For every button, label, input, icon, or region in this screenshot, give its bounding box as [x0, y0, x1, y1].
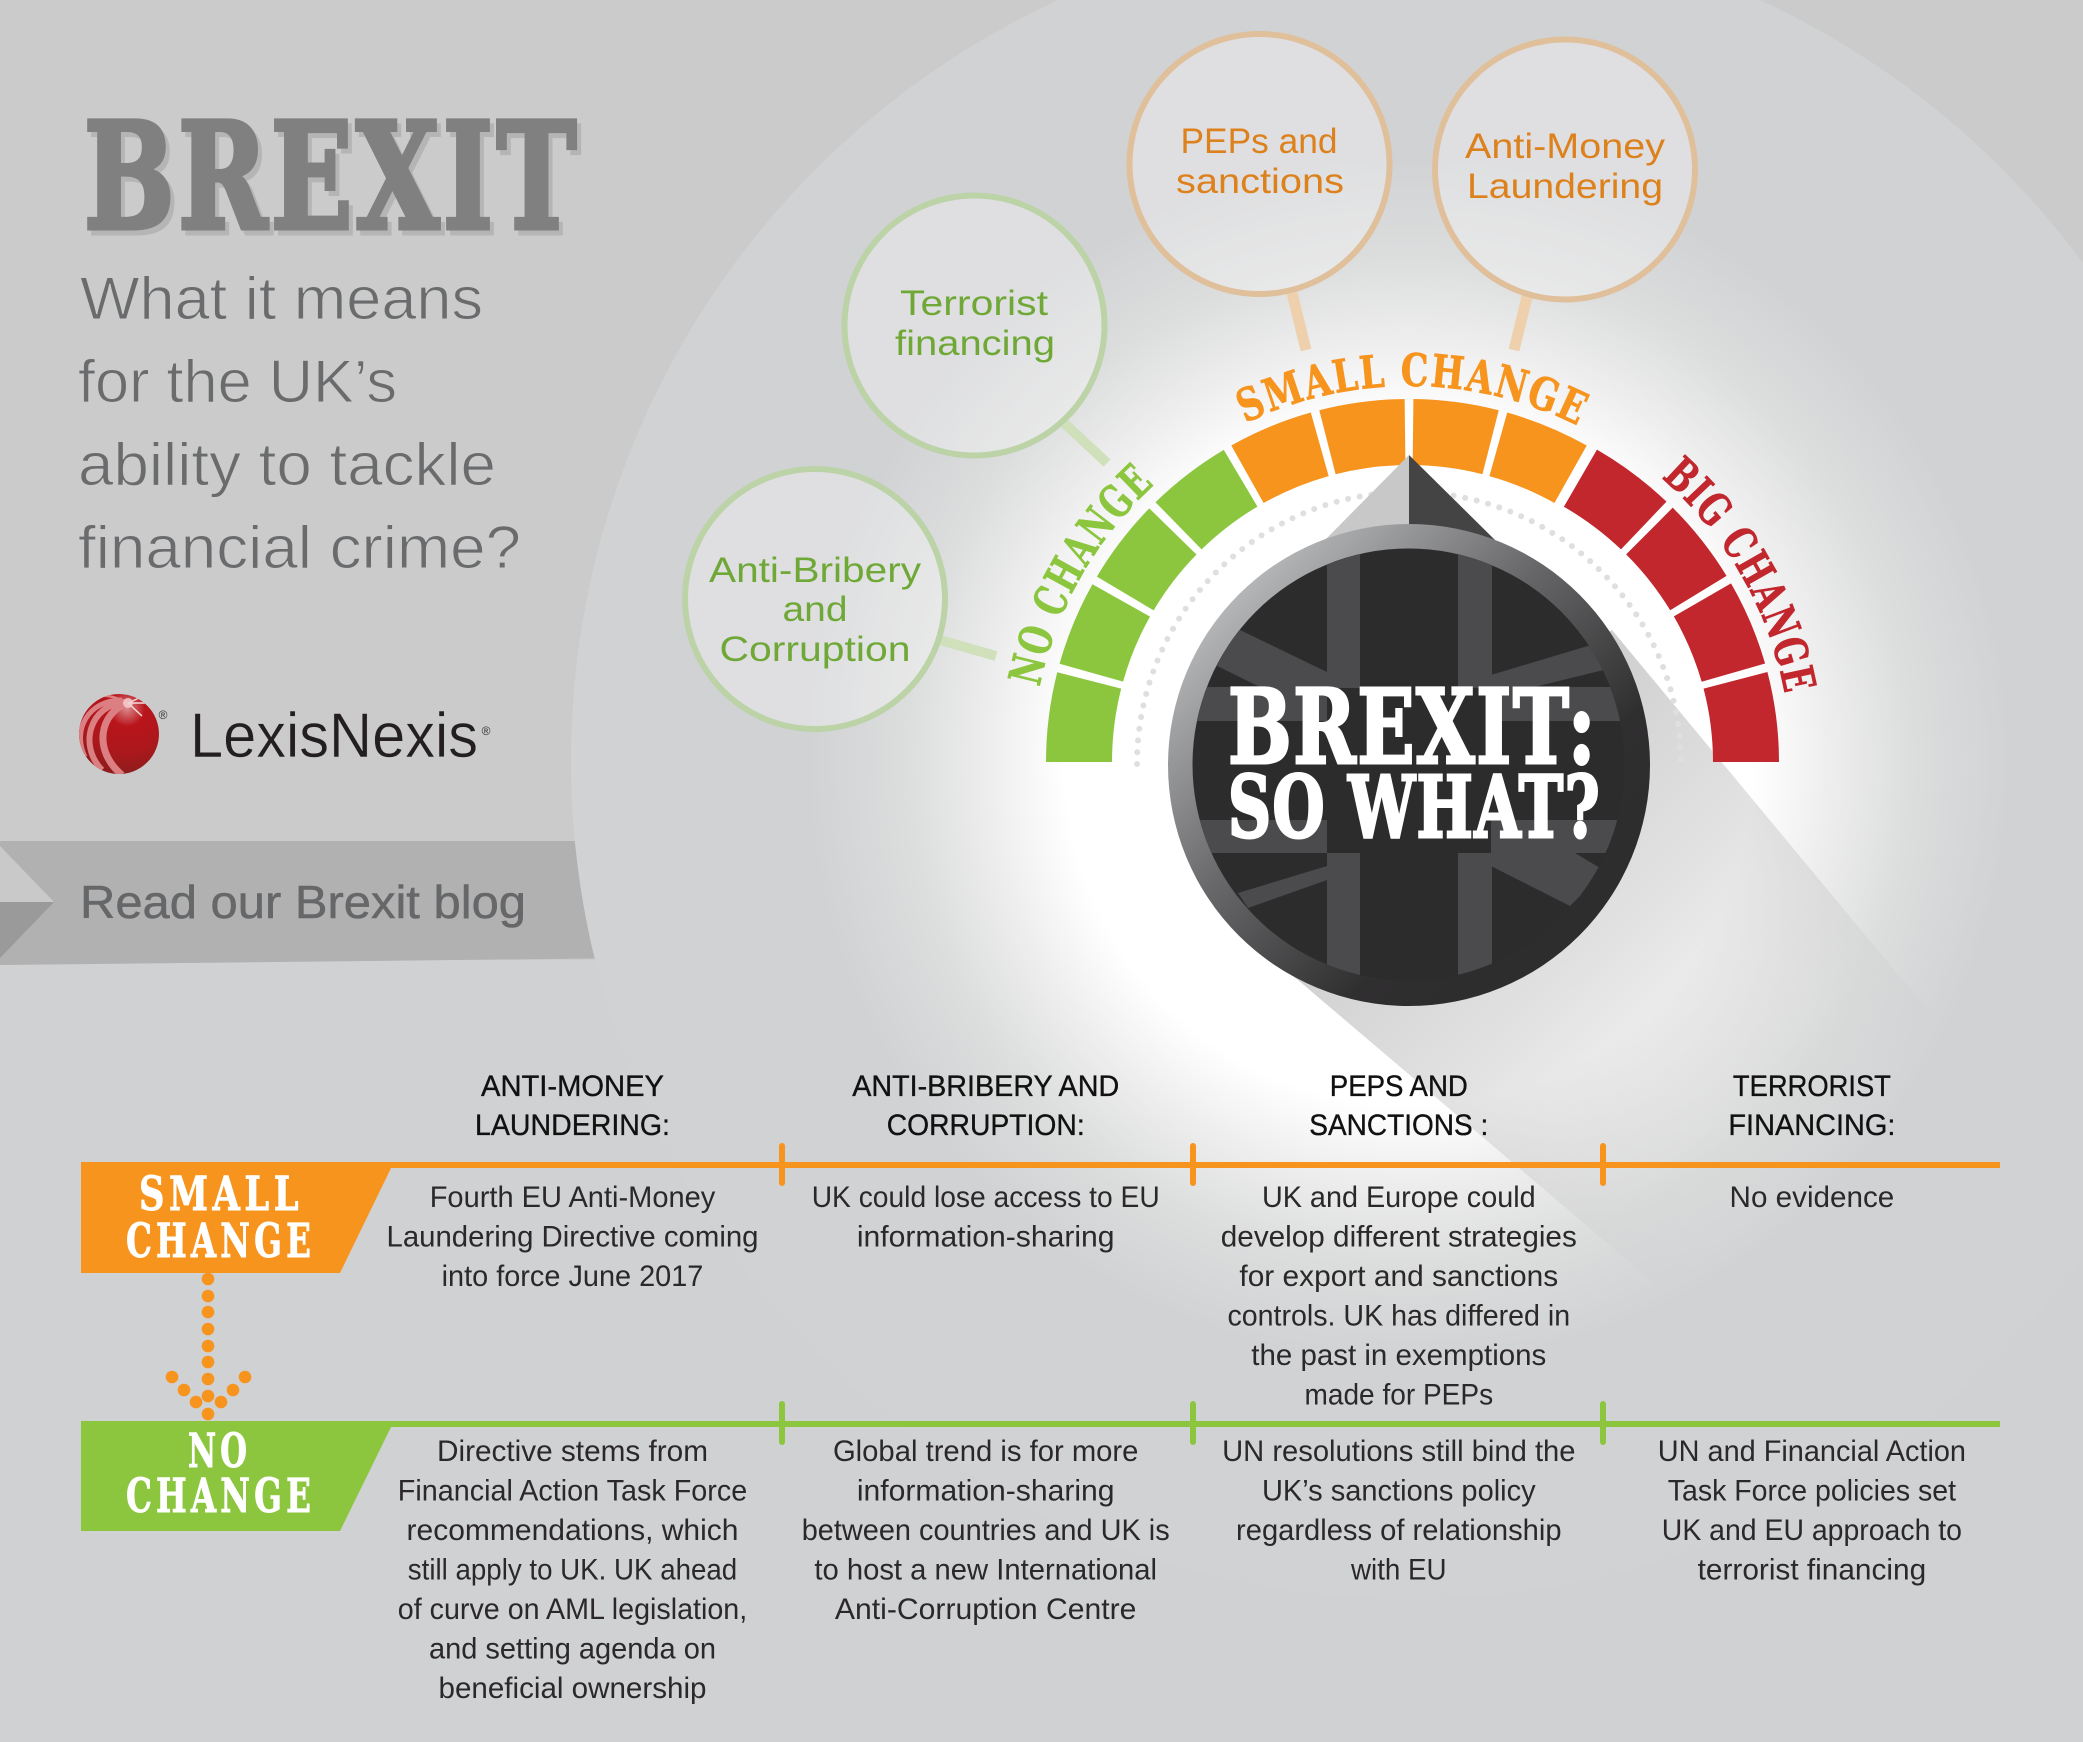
column heading: anti-bribery and corruption — [852, 1070, 1119, 1142]
no change: anti-money laundering text: recommendations, which — [406, 1514, 738, 1547]
no change: anti-money laundering text: Financial Action Task Force — [398, 1474, 747, 1508]
small change: PEPs and sanctions text: controls. UK has differed in — [1227, 1300, 1570, 1332]
small change: terrorist financing text: No evidence — [1730, 1181, 1894, 1214]
column heading: terrorist financing — [1728, 1070, 1895, 1142]
dotted ring — [1137, 492, 1681, 764]
column heading: terrorist financing: TERRORIST — [1733, 1070, 1891, 1103]
dial pointer — [1325, 455, 1495, 560]
tag: small change: CHANGE — [126, 1214, 315, 1269]
gauge label: no change: NO CHANGE — [1007, 462, 1154, 686]
title: BREXIT — [84, 90, 580, 263]
column heading: anti-bribery and corruption: ANTI-BRIBERY AND — [852, 1070, 1119, 1103]
callout: PEPs and sanctions — [1130, 34, 1390, 350]
tag: no change: CHANGE — [126, 1469, 315, 1524]
small change: anti-money laundering text — [386, 1181, 758, 1293]
subtitle: What it means — [80, 265, 483, 332]
dial title — [1228, 667, 1601, 858]
column heading: anti-money laundering — [475, 1070, 670, 1142]
callout: terrorist financing — [844, 196, 1107, 463]
no change: anti-money laundering text: still apply to UK. UK ahead — [408, 1554, 737, 1586]
no change: anti-money laundering text: and setting agenda on — [429, 1632, 716, 1666]
callout: terrorist financing: financing — [895, 324, 1055, 363]
no change: anti-money laundering text: beneficial ownership — [438, 1672, 706, 1705]
timeline: no change line — [81, 1401, 2000, 1445]
small change: anti-money laundering text: Laundering Directive coming — [386, 1220, 758, 1254]
title: BREXIT — [88, 95, 584, 268]
no change: anti-bribery text — [802, 1435, 1170, 1626]
subtitle: financial crime? — [78, 514, 521, 581]
small change: anti-bribery text: UK could lose access to EU — [812, 1181, 1160, 1214]
no change: anti-bribery text: to host a new International — [814, 1554, 1157, 1586]
no change: anti-bribery text: Global trend is for more — [833, 1435, 1138, 1468]
gauge: segmented scale — [1079, 432, 1746, 762]
small change: anti-bribery text: information-sharing — [857, 1220, 1115, 1254]
no change: anti-bribery text: between countries and UK is — [802, 1514, 1170, 1547]
banner: read our Brexit blog: Read our Brexit blog — [80, 876, 526, 928]
no change: PEPs and sanctions text: regardless of relationship — [1236, 1514, 1562, 1547]
no change: anti-bribery text: Anti-Corruption Centre — [835, 1593, 1136, 1626]
subtitle: for the UK’s — [78, 348, 397, 415]
callout: terrorist financing: Terrorist — [900, 284, 1048, 323]
column heading: anti-money laundering: LAUNDERING: — [475, 1109, 670, 1142]
no change: terrorist financing text: terrorist financing — [1698, 1554, 1926, 1586]
column heading: PEPs and sanctions — [1309, 1070, 1488, 1142]
tag: small change — [81, 1162, 394, 1273]
dial title: BREXIT: — [1228, 667, 1597, 788]
no change: anti-bribery text: information-sharing — [857, 1474, 1115, 1508]
callout: anti-money laundering: Laundering — [1467, 167, 1663, 206]
callout: anti-bribery and corruption: Corruption — [720, 630, 910, 669]
long shadow of dial — [1285, 630, 2083, 1407]
no change: anti-money laundering text: Directive stems from — [437, 1435, 708, 1468]
column heading: PEPs and sanctions: SANCTIONS : — [1309, 1109, 1488, 1142]
callout: PEPs and sanctions: PEPs and — [1180, 122, 1338, 161]
tag: no change — [81, 1421, 394, 1531]
arrow: dotted down — [166, 1273, 251, 1420]
union jack pattern — [1197, 554, 1620, 975]
no change: terrorist financing text — [1658, 1435, 1966, 1586]
no change: terrorist financing text: Task Force policies set — [1668, 1474, 1956, 1508]
no change: PEPs and sanctions text: UK’s sanctions policy — [1262, 1474, 1536, 1508]
subtitle: ability to tackle — [78, 431, 496, 498]
small change: anti-money laundering text: into force June 2017 — [442, 1260, 703, 1293]
column heading: anti-money laundering: ANTI-MONEY — [481, 1070, 664, 1103]
small change: anti-money laundering text: Fourth EU Anti-Money — [430, 1181, 716, 1214]
icon: globe — [79, 694, 159, 775]
column heading: anti-bribery and corruption: CORRUPTION: — [887, 1109, 1085, 1142]
small change: PEPs and sanctions text: made for PEPs — [1304, 1378, 1493, 1412]
small change: PEPs and sanctions text: UK and Europe could — [1262, 1181, 1536, 1214]
callout: anti-bribery and corruption — [685, 469, 996, 729]
small change: PEPs and sanctions text: develop different strategies — [1221, 1220, 1577, 1254]
small change segments — [1244, 432, 1574, 476]
small change: PEPs and sanctions text: for export and sanctions — [1239, 1260, 1558, 1293]
big change segments — [1577, 476, 1746, 762]
callout: anti-bribery and corruption: Anti-Bribery — [709, 551, 922, 590]
LexisNexis logo: LexisNexis — [190, 701, 478, 771]
column heading: terrorist financing: FINANCING: — [1728, 1109, 1895, 1142]
tag: no change: NO — [188, 1424, 251, 1479]
large glow circle — [571, 0, 2083, 1599]
no change: anti-money laundering text: of curve on AML legislation, — [398, 1593, 747, 1626]
no change: terrorist financing text: UN and Financial Action — [1658, 1435, 1966, 1468]
no change: PEPs and sanctions text: UN resolutions still bind the — [1222, 1435, 1576, 1468]
LexisNexis logo: ® — [482, 724, 491, 738]
no change: PEPs and sanctions text: with EU — [1350, 1554, 1447, 1586]
banner: read our Brexit blog — [0, 841, 640, 965]
no change: terrorist financing text: UK and EU approach to — [1662, 1514, 1962, 1547]
registered mark: ® — [159, 708, 168, 722]
LexisNexis logo — [79, 694, 491, 775]
small change: PEPs and sanctions text — [1221, 1181, 1577, 1412]
small change: PEPs and sanctions text: the past in exemptions — [1251, 1339, 1546, 1372]
callout: anti-money laundering: Anti-Money — [1465, 127, 1666, 166]
gauge label: small change: SMALL CHANGE — [1236, 352, 1590, 426]
column heading: PEPs and sanctions: PEPS AND — [1330, 1070, 1468, 1103]
small change: anti-bribery text — [812, 1181, 1160, 1254]
dial knob — [1168, 524, 1650, 1006]
no change segments — [1079, 476, 1244, 762]
tag: small change: SMALL — [139, 1167, 303, 1222]
no change: anti-money laundering text — [398, 1435, 747, 1705]
timeline: small change line — [81, 1143, 2000, 1186]
callout: PEPs and sanctions: sanctions — [1176, 162, 1344, 201]
subtitle — [78, 265, 521, 581]
callout: anti-money laundering — [1435, 40, 1695, 350]
gauge label: big change: BIG CHANGE — [1662, 454, 1817, 692]
no change: PEPs and sanctions text — [1222, 1435, 1576, 1586]
dial title: SO WHAT? — [1228, 758, 1601, 858]
callout: anti-bribery and corruption: and — [782, 590, 848, 629]
